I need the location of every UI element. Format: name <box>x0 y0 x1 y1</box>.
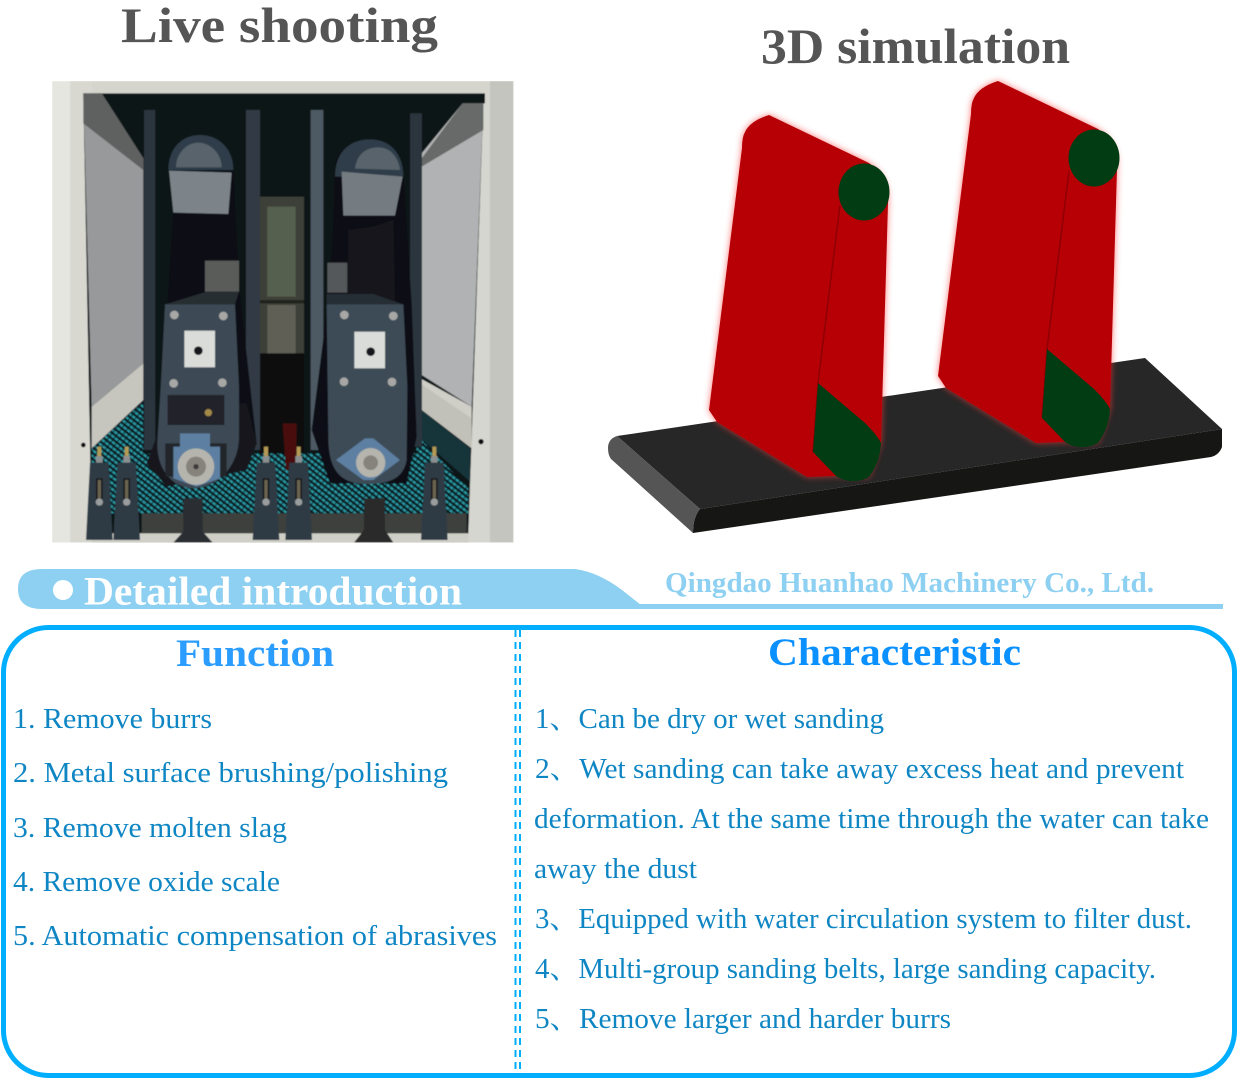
heading: Characteristic: Characteristic <box>768 631 1021 674</box>
function list <box>13 703 497 952</box>
function list: 3. Remove molten slag <box>13 812 287 844</box>
section banner: Detailed introduction <box>18 568 1223 614</box>
company name: Qingdao Huanhao Machinery Co., Ltd. <box>665 568 1154 599</box>
characteristic list: away the dust <box>534 853 697 885</box>
characteristic list: 3、Equipped with water circulation system to filter dust. <box>535 903 1192 935</box>
function list: 1. Remove burrs <box>13 703 212 735</box>
panel: function and characteristic <box>4 628 1234 1076</box>
characteristic list: 1、Can be dry or wet sanding <box>535 703 884 735</box>
function list: 5. Automatic compensation of abrasives <box>13 920 497 952</box>
function list: 2. Metal surface brushing/polishing <box>13 757 448 789</box>
characteristic list: 4、Multi-group sanding belts, large sanding capacity. <box>535 953 1156 985</box>
base plate <box>608 358 1222 533</box>
heading: Function: Function <box>176 632 334 675</box>
characteristic list: 5、Remove larger and harder burrs <box>535 1003 951 1035</box>
function list: 4. Remove oxide scale <box>13 866 280 898</box>
right belt <box>938 81 1120 447</box>
left belt <box>709 115 890 481</box>
characteristic list: 2、Wet sanding can take away excess heat and prevent <box>535 753 1184 785</box>
characteristic list: deformation. At the same time through the water can take <box>534 803 1209 835</box>
3D simulation model <box>608 81 1222 533</box>
title: 3D simulation: 3D simulation <box>761 18 1070 74</box>
characteristic list <box>534 703 1209 1035</box>
section banner: Detailed introduction: Detailed introduction <box>84 568 462 614</box>
photo: sanding machine live shot <box>52 81 514 543</box>
